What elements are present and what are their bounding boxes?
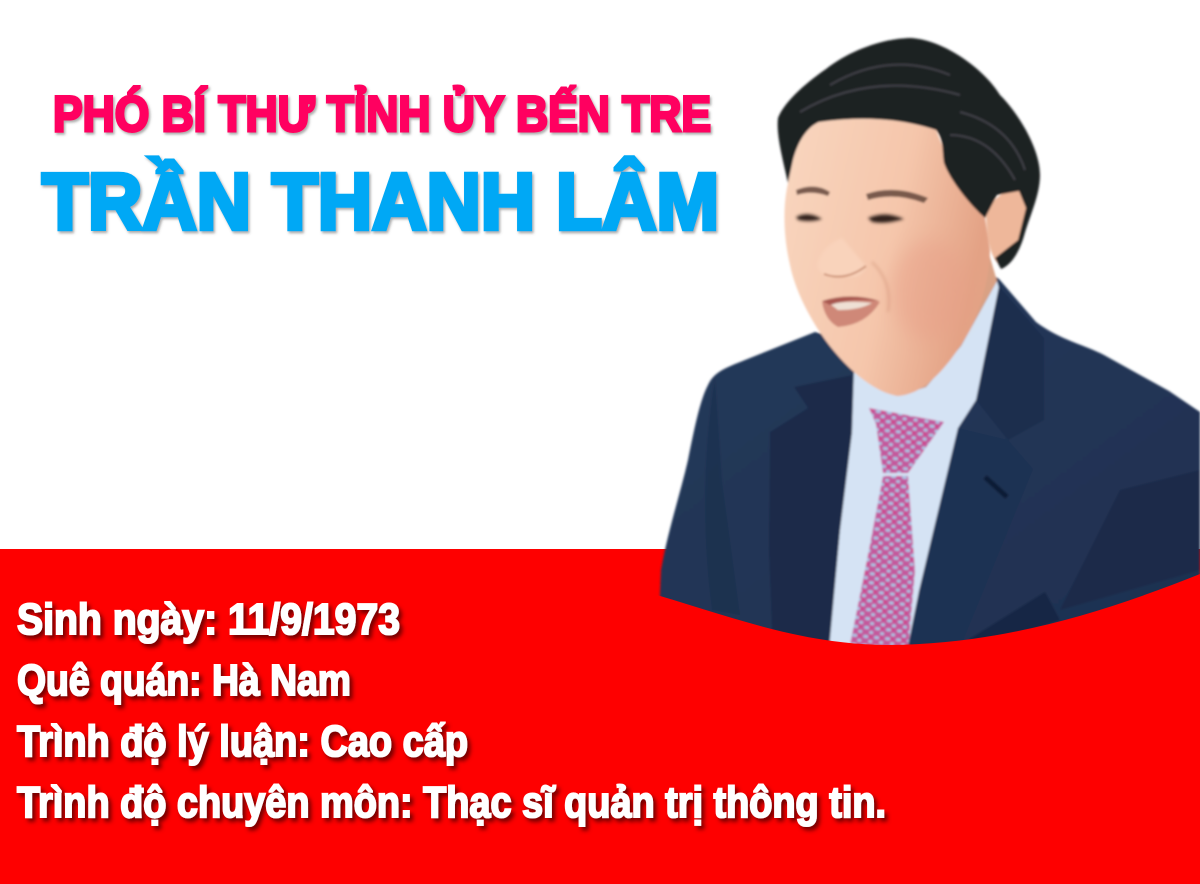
tie — [869, 408, 944, 473]
sleeve shading — [1060, 470, 1200, 610]
left lapel — [769, 375, 852, 645]
eyebrows — [796, 186, 830, 196]
mouth — [822, 298, 880, 327]
biography text block — [17, 595, 886, 827]
ear — [986, 191, 1026, 265]
portrait of the official — [659, 38, 1200, 670]
face — [784, 119, 990, 396]
title: name: TRẦN THANH LÂM — [42, 157, 719, 246]
neck — [920, 256, 999, 390]
upper right collar — [976, 286, 1042, 412]
nose — [828, 241, 864, 276]
lapel buttonhole — [985, 477, 1007, 497]
cheek blush — [892, 246, 942, 327]
shirt — [829, 281, 1004, 650]
red info band — [0, 549, 1200, 884]
jacket — [659, 270, 1200, 670]
hair — [778, 38, 1040, 269]
political theory level: Trình độ lý luận: Cao cấp — [17, 717, 468, 766]
smile line — [872, 262, 889, 312]
hair highlights — [800, 65, 1025, 180]
pocket — [968, 592, 1060, 640]
date of birth: Sinh ngày: 11/9/1973 — [17, 595, 400, 644]
title: position: PHÓ BÍ THƯ TỈNH ỦY BẾN TRE — [53, 85, 711, 142]
lower right lapel — [907, 434, 1007, 644]
eyes — [796, 214, 904, 223]
hometown: Quê quán: Hà Nam — [17, 656, 351, 705]
professional qualification: Trình độ chuyên môn: Thạc sĩ quản trị thông tin. — [17, 778, 886, 827]
